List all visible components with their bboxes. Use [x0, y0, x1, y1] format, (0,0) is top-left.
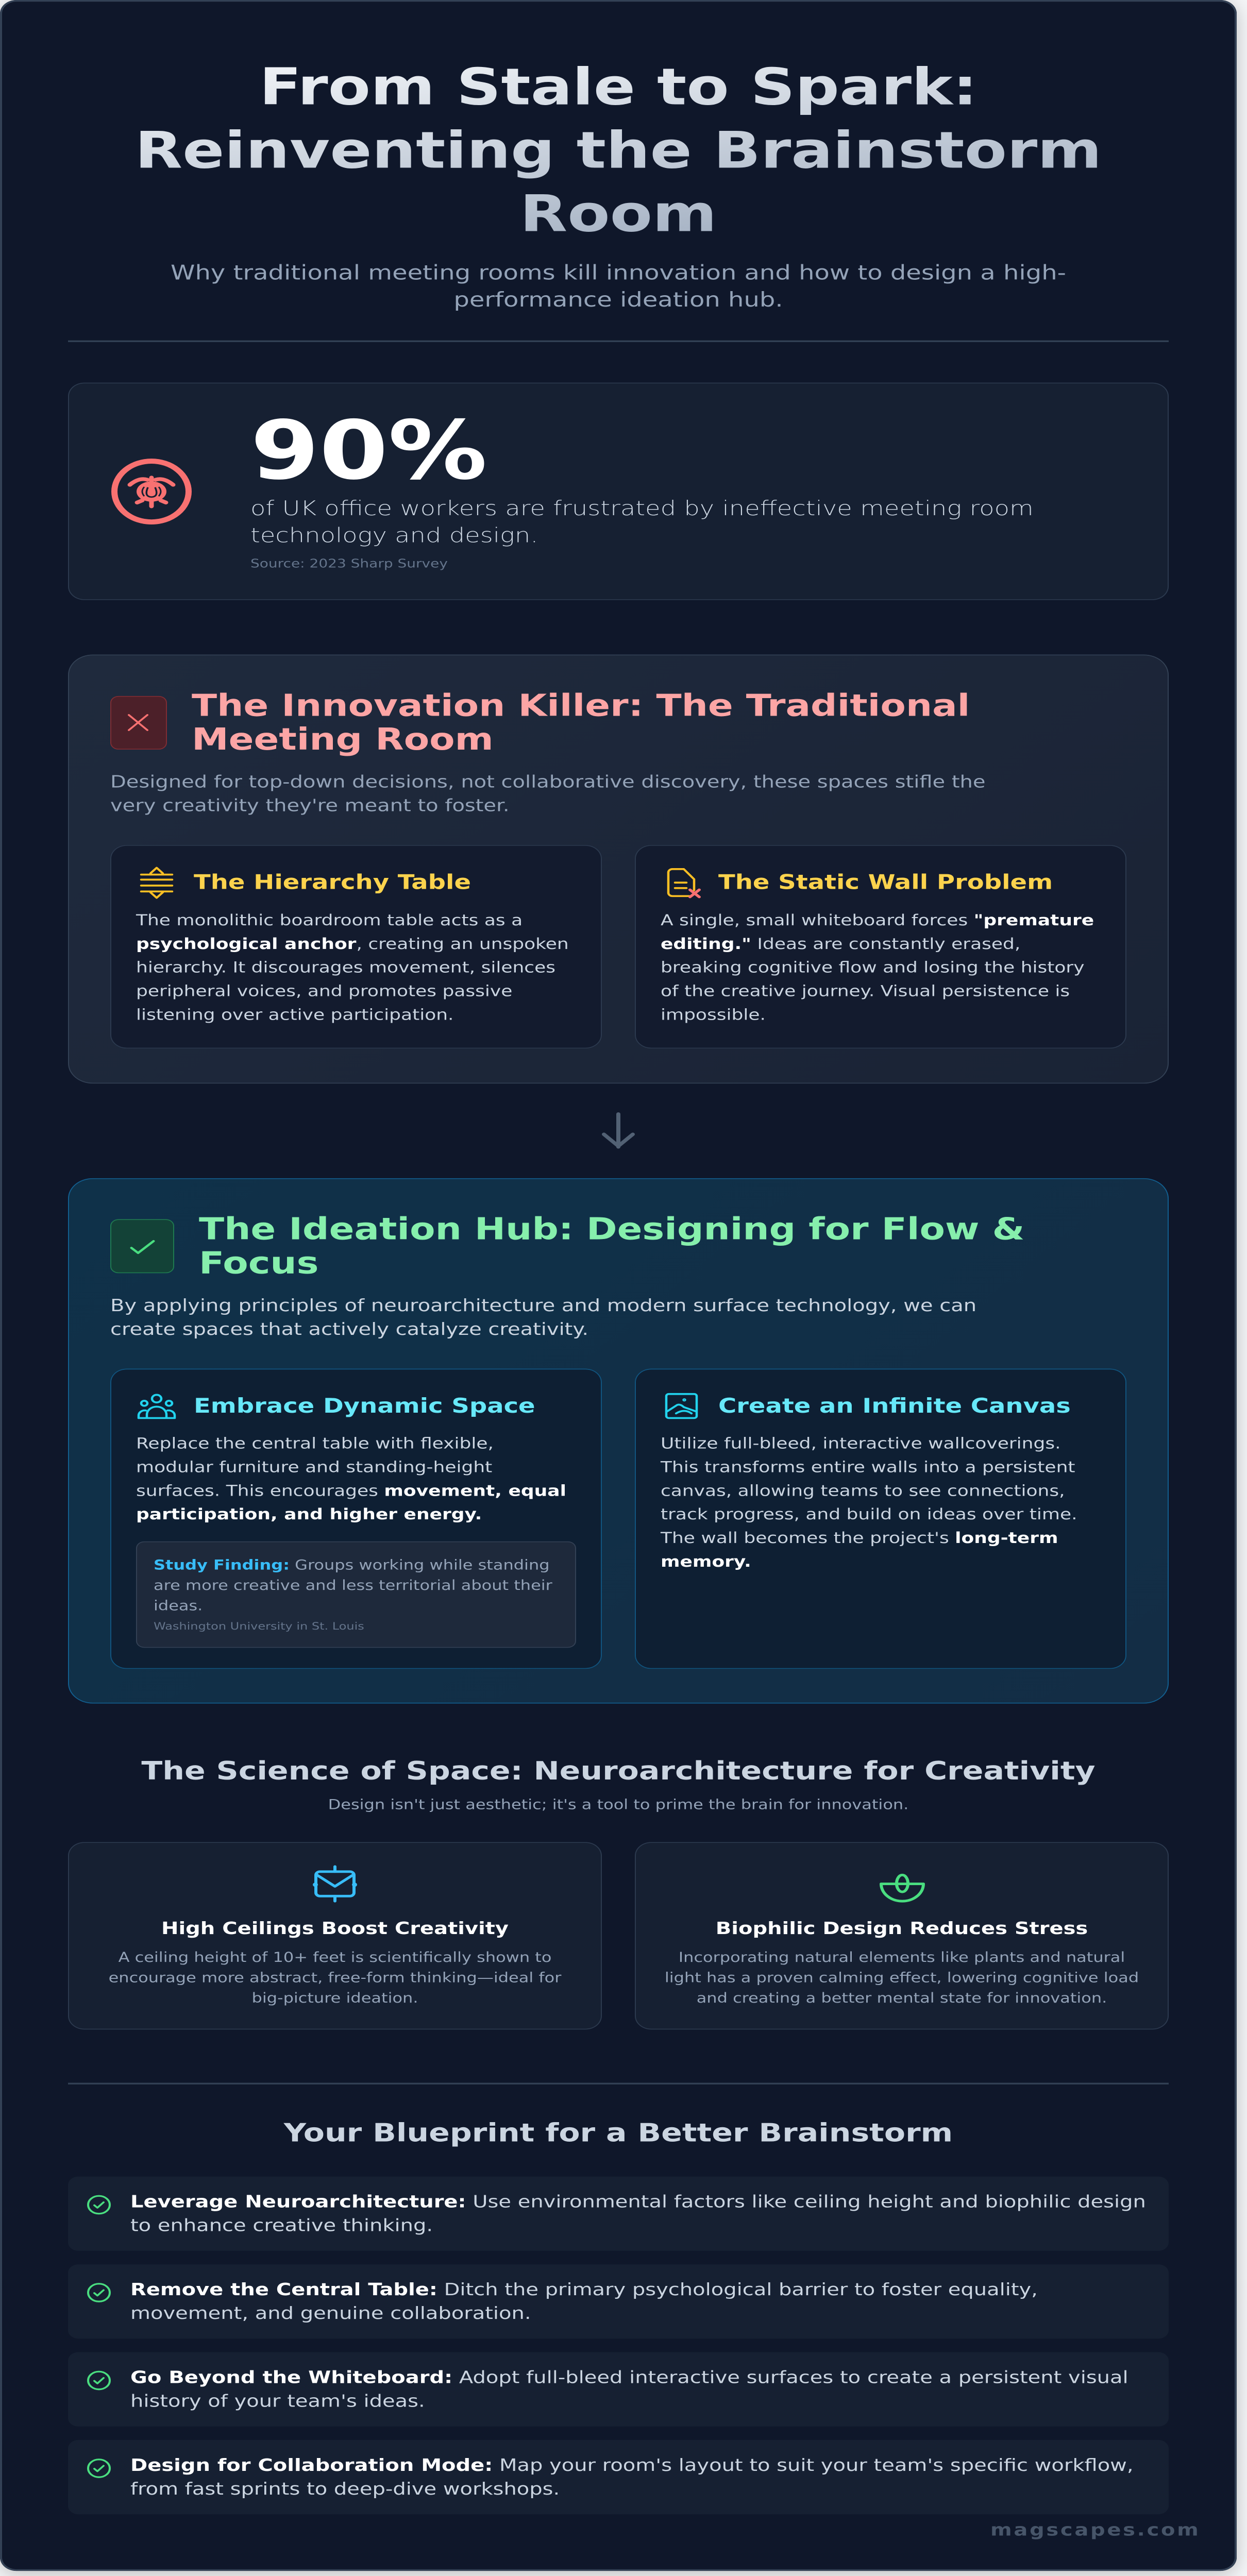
section heading: Meeting Room: [192, 721, 494, 757]
item text: movement, and genuine collaboration.: [130, 2303, 531, 2323]
item text: [130, 2278, 1038, 2325]
card text: big-picture ideation.: [252, 1990, 418, 2006]
title: Reinventing the Brainstorm: [135, 121, 1102, 180]
card: hierarchy table: [110, 845, 602, 1048]
card body: peripheral voices, and promotes passive: [136, 982, 512, 1000]
heading: science of space: The Science of Space: Neuroarchitecture for Creativity: [141, 1756, 1096, 1786]
item text: [130, 2453, 1134, 2501]
card body: [661, 912, 1094, 1024]
card heading: The Static Wall Problem: [718, 870, 1053, 894]
icon: hierarchy: [140, 867, 173, 899]
icon: turtle in circle: [111, 459, 192, 524]
card body: [661, 1432, 1077, 1574]
callout text: are more creative and less territorial about their: [154, 1577, 552, 1594]
card body: hierarchy. It discourages movement, silences: [136, 959, 555, 976]
title: Room: [520, 184, 717, 243]
card body: memory.: [661, 1553, 751, 1570]
section description: very creativity they're meant to foster.: [110, 796, 510, 816]
callout: study finding: [136, 1541, 576, 1648]
item text: from fast sprints to deep-dive workshops.: [130, 2479, 560, 2499]
stat description: [250, 497, 1034, 547]
card: static wall: [635, 845, 1126, 1048]
item text: Leverage Neuroarchitecture: Use environmental factors like ceiling height and biophilic design: [130, 2192, 1146, 2212]
card heading: Embrace Dynamic Space: [194, 1394, 535, 1418]
section description: [110, 1296, 976, 1339]
subtitle: performance ideation hub.: [453, 288, 783, 312]
item text: Design for Collaboration Mode: Map your room's layout to suit your team's specific workflow,: [130, 2455, 1134, 2475]
section description: create spaces that actively catalyze creativity.: [110, 1319, 588, 1339]
icon: cross badge: [110, 696, 167, 750]
card: biophilic design: [635, 1842, 1169, 2029]
section description: Designed for top-down decisions, not collaborative discovery, these spaces stifle the: [110, 772, 985, 792]
panel: the ideation hub: [68, 1178, 1169, 1704]
list item 1: [68, 2177, 1169, 2251]
item text: to enhance creative thinking.: [130, 2216, 433, 2235]
subtitle: Why traditional meeting rooms kill innovation and how to design a high-: [171, 261, 1066, 284]
list item 4: [68, 2440, 1169, 2514]
stat source: Source: 2023 Sharp Survey: [250, 556, 448, 570]
card body: modular furniture and standing-height: [136, 1459, 492, 1476]
callout text: Study Finding: Groups working while standing: [154, 1557, 550, 1573]
card body: participation, and higher energy.: [136, 1506, 482, 1523]
item text: Go Beyond the Whiteboard: Adopt full-bleed interactive surfaces to create a persistent visual: [130, 2368, 1128, 2387]
card body: psychological anchor, creating an unspoken: [136, 936, 569, 953]
card body: of the creative journey. Visual persistence is: [661, 982, 1070, 1000]
section heading: Focus: [199, 1245, 319, 1280]
card heading: Biophilic Design Reduces Stress: [716, 1919, 1088, 1938]
icon: document with cross: [667, 868, 701, 899]
subtitle: [171, 261, 1066, 312]
stat description: technology and design.: [250, 523, 538, 547]
card text: and creating a better mental state for innovation.: [697, 1990, 1107, 2006]
item text: Remove the Central Table: Ditch the primary psychological barrier to foster equality,: [130, 2280, 1038, 2299]
card text: A ceiling height of 10+ feet is scientifically shown to: [119, 1950, 551, 1965]
card body: The wall becomes the project's long-term: [661, 1530, 1058, 1547]
title: From Stale to Spark:: [259, 58, 978, 116]
panel: 90% stat: [68, 383, 1169, 600]
stat number: 90%: [250, 404, 487, 498]
card body: surfaces. This encourages movement, equal: [136, 1482, 566, 1500]
list item 3: [68, 2352, 1169, 2427]
icon: check circle: [87, 2370, 111, 2391]
card body: [136, 912, 569, 1024]
card body: [136, 1435, 566, 1523]
card body: This transforms entire walls into a persistent: [661, 1459, 1075, 1476]
card body: editing." Ideas are constantly erased,: [661, 936, 1020, 953]
card body: The monolithic boardroom table acts as a: [136, 912, 523, 929]
icon: check circle: [87, 2282, 111, 2303]
icon: plant bowl: [877, 1862, 926, 1903]
card body: Utilize full-bleed, interactive wallcoverings.: [661, 1435, 1061, 1452]
stat description: of UK office workers are frustrated by ineffective meeting room: [250, 497, 1034, 520]
icon: check badge: [110, 1219, 174, 1273]
card body: Replace the central table with flexible,: [136, 1435, 494, 1452]
card: infinite canvas: [635, 1369, 1126, 1669]
subheading: Design isn't just aesthetic; it's a tool to prime the brain for innovation.: [328, 1797, 908, 1812]
heading: blueprint: Your Blueprint for a Better Brainstorm: [284, 2118, 953, 2148]
icon: people: [137, 1394, 176, 1419]
item text: [130, 2366, 1128, 2413]
card text: encourage more abstract, free-form thinking—ideal for: [109, 1970, 561, 1986]
card heading: Create an Infinite Canvas: [718, 1394, 1071, 1418]
card text: light has a proven calming effect, lowering cognitive load: [665, 1970, 1139, 1986]
card heading: High Ceilings Boost Creativity: [161, 1919, 509, 1938]
arrow: down: [602, 1112, 635, 1149]
section heading: The Innovation Killer: The Traditional: [192, 687, 970, 723]
icon: check circle: [87, 2458, 111, 2479]
item text: [130, 2190, 1146, 2238]
card: high ceilings: [68, 1842, 602, 2029]
footer brand: magscapes.com: [990, 2520, 1201, 2539]
icon: image canvas: [661, 1389, 702, 1423]
icon: check circle: [87, 2195, 111, 2215]
section heading: The Ideation Hub: Designing for Flow &: [199, 1211, 1024, 1247]
card body: canvas, allowing teams to see connections,: [661, 1482, 1065, 1500]
section heading: [199, 1211, 1024, 1280]
card body: breaking cognitive flow and losing the history: [661, 959, 1085, 976]
card body: track progress, and build on ideas over time.: [661, 1506, 1077, 1523]
card text: [68, 1947, 602, 2008]
list item 2: [68, 2264, 1169, 2338]
callout text: ideas.: [154, 1598, 203, 1614]
panel: the innovation killer: [68, 654, 1169, 1083]
callout text: [154, 1555, 552, 1616]
section description: By applying principles of neuroarchitecture and modern surface technology, we can: [110, 1296, 976, 1315]
card body: impossible.: [661, 1006, 766, 1024]
icon: ceiling: [310, 1862, 360, 1903]
card text: Incorporating natural elements like plants and natural: [679, 1950, 1125, 1965]
card body: listening over active participation.: [136, 1006, 453, 1024]
title: [68, 56, 1169, 246]
callout source: Washington University in St. Louis: [154, 1620, 364, 1632]
card text: [635, 1947, 1169, 2008]
card body: A single, small whiteboard forces "premature: [661, 912, 1094, 929]
section description: [110, 772, 985, 816]
item text: history of your team's ideas.: [130, 2392, 425, 2411]
card: dynamic space: [110, 1369, 602, 1669]
section heading: [192, 687, 970, 757]
card heading: The Hierarchy Table: [194, 870, 471, 894]
